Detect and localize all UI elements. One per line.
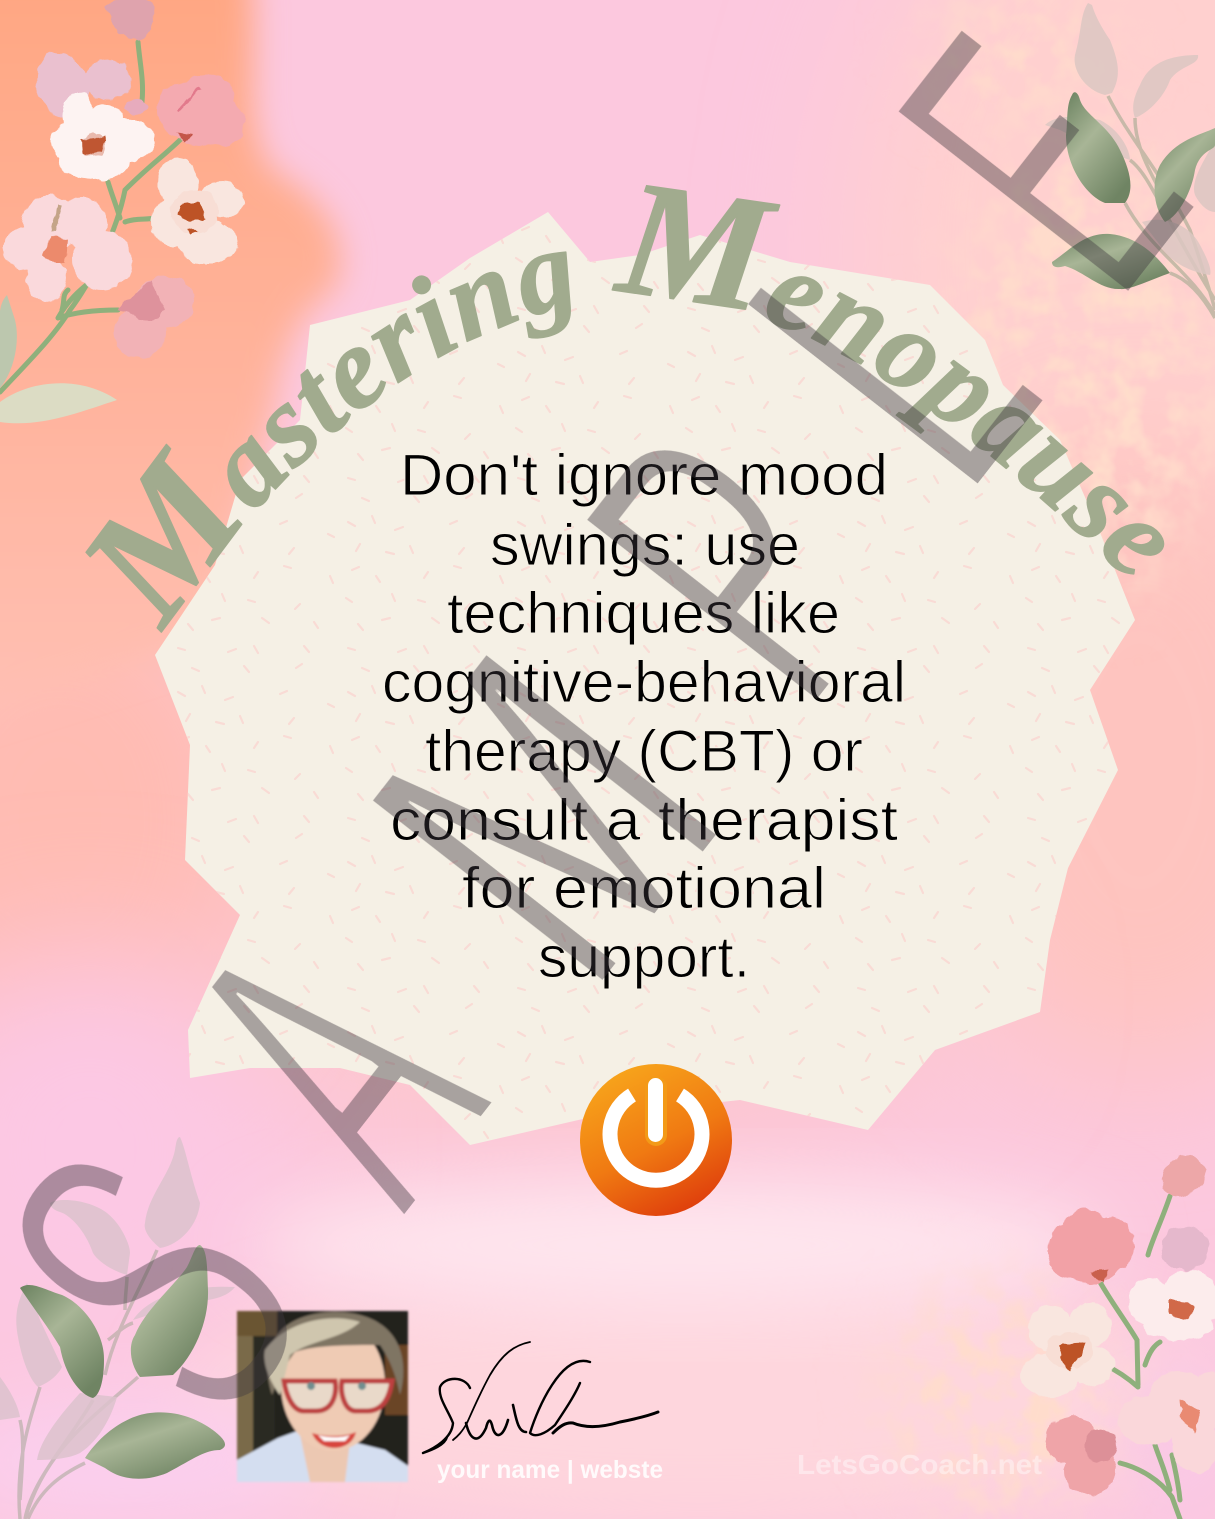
faded leaves bbox=[1045, 3, 1215, 275]
white flower bbox=[1128, 1270, 1215, 1340]
pink flower bbox=[1048, 1209, 1134, 1283]
faded stems bbox=[19, 1250, 157, 1519]
pink flower bbox=[158, 74, 245, 146]
photo: portrait bbox=[237, 1311, 408, 1482]
body text bbox=[382, 443, 906, 990]
body text: cognitive-behavioral bbox=[382, 650, 906, 715]
body text: therapy (CBT) or bbox=[425, 719, 863, 784]
body text: support. bbox=[538, 925, 750, 990]
decoration: leaves bottom left bbox=[0, 1137, 235, 1519]
rose flower bbox=[114, 276, 195, 358]
faded stems bbox=[1108, 96, 1215, 318]
watermark: SAMPLE: P bbox=[497, 354, 975, 774]
green leaves bbox=[20, 1285, 104, 1398]
stems bbox=[0, 42, 182, 392]
peach flower bbox=[1020, 1303, 1114, 1397]
bud bbox=[105, 0, 154, 40]
caption: LetsGoCoach.net: LetsGoCoach.net bbox=[797, 1449, 1042, 1480]
blush flower bbox=[2, 195, 132, 302]
icon: power button bbox=[580, 1064, 732, 1216]
body text: techniques like bbox=[447, 581, 840, 646]
title: Mastering Menopause: Mastering Menopause bbox=[85, 185, 1164, 633]
body text: swings: use bbox=[490, 513, 800, 578]
decoration: leaves top right bbox=[1045, 3, 1215, 318]
blossoms bbox=[1020, 1155, 1215, 1496]
faded leaves bbox=[0, 1137, 235, 1460]
watermark: SAMPLE: L bbox=[658, 153, 1124, 559]
body text: Don't ignore mood bbox=[400, 443, 888, 508]
leaves bbox=[0, 383, 117, 423]
lilac flower bbox=[27, 44, 147, 126]
watermark: SAMPLE: M bbox=[281, 576, 807, 1058]
rose flower bbox=[1046, 1416, 1116, 1496]
watermark: SAMPLE: A bbox=[96, 860, 571, 1276]
signature bbox=[423, 1342, 658, 1453]
blush flower bbox=[1118, 1371, 1215, 1473]
body text: for emotional bbox=[462, 856, 826, 921]
white flower bbox=[51, 91, 155, 180]
panel: torn paper shape bbox=[155, 212, 1135, 1145]
decoration: flowers bottom right bbox=[1020, 1155, 1215, 1519]
green leaves bbox=[1066, 92, 1130, 203]
peach flower bbox=[151, 158, 244, 264]
lilac flower bbox=[1161, 1226, 1209, 1270]
body text: consult a therapist bbox=[390, 788, 898, 853]
decoration: flowers top left bbox=[0, 0, 245, 423]
caption: your name | webste: your name | webste bbox=[437, 1456, 663, 1484]
bud bbox=[1161, 1155, 1207, 1196]
stems bbox=[1100, 1196, 1180, 1519]
blossoms bbox=[2, 44, 245, 358]
